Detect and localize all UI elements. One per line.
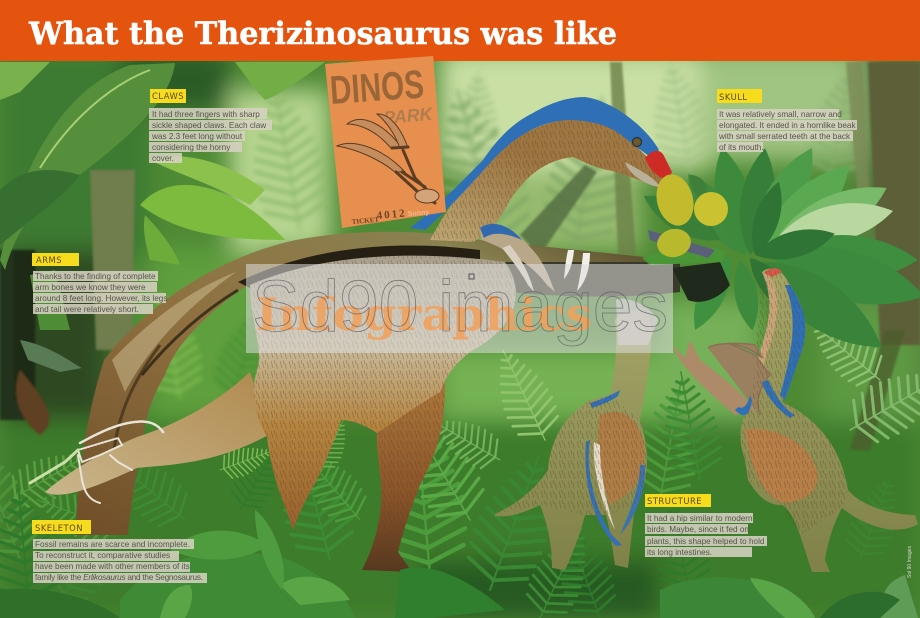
- title band: [0, 0, 920, 61]
- foreground foliage: [0, 510, 918, 618]
- title: What the Therizinosaurus was like: [28, 16, 617, 52]
- skeleton line drawing: [30, 422, 163, 503]
- text: claws description: considering the horny: [152, 143, 231, 152]
- label: arms: ARMS: [36, 255, 62, 265]
- text: structure description: plants, this shape helped to hold: [647, 537, 765, 546]
- text: claws description: was 2.3 feet long without: [151, 132, 243, 141]
- photo credit: Sol 90 Images: [907, 546, 913, 578]
- text: arms description: and tail were relatively short.: [35, 305, 139, 314]
- callout: skeleton: [32, 520, 207, 583]
- ticket number: TICKET: [351, 216, 380, 226]
- text: arms description: arm bones we know they were: [35, 283, 146, 292]
- background tree trunks: [0, 62, 920, 450]
- text: arms description: around 8 feet long. However, its legs: [35, 294, 167, 303]
- label: claws: CLAWS: [152, 91, 184, 101]
- label: structure: STRUCTURE: [647, 496, 702, 506]
- hazy palm fronds in the background: [134, 57, 876, 408]
- text: skeleton description: have been made with other members of its: [35, 562, 190, 571]
- text: skull description: of its mouth.: [719, 143, 764, 152]
- palm trunk the dinosaur pulls down: [75, 232, 655, 535]
- ticket brand title: DINOS: [329, 63, 425, 113]
- main dinosaur: tail: [45, 372, 270, 495]
- callout: arms: [32, 253, 167, 314]
- watermark outline text: Sd90 images: [252, 267, 668, 347]
- main dinosaur: arm and claws: [480, 224, 590, 292]
- red beak: [645, 151, 672, 180]
- label: skeleton: SKELETON: [35, 523, 83, 533]
- text: arms description: Thanks to the finding of complete: [35, 272, 156, 281]
- text: structure description: It had a hip similar to modern: [647, 514, 753, 523]
- eye: [632, 138, 642, 146]
- watermark orange text: Infographics: [256, 288, 592, 341]
- text: claws description: It had three fingers with sharp: [152, 110, 260, 119]
- text: structure description: birds. Maybe, since it fed on: [647, 525, 749, 534]
- ferns: [0, 307, 920, 618]
- text: skull description: elongated. It ended in a hornlike beak: [719, 121, 856, 130]
- text: skull description: It was relatively small, narrow and: [719, 110, 842, 119]
- text: arms description: [33, 271, 167, 314]
- ticket: Sunny: [408, 209, 430, 218]
- blue feather crest: [410, 97, 659, 230]
- text: skeleton description: To reconstruct it, comparative studies: [35, 551, 170, 560]
- fruit plant: [637, 139, 920, 366]
- claw fossil drawing: [337, 114, 439, 203]
- ticket top edge over band: [325, 56, 434, 66]
- callout: skull: [717, 89, 857, 152]
- text: claws description: [149, 108, 272, 163]
- label: skeleton: [32, 520, 91, 534]
- text: structure description: [645, 513, 767, 557]
- ticket subtitle: PARK: [383, 104, 435, 128]
- text: skeleton description: Fossil remains are scarce and incomplete.: [35, 540, 190, 549]
- text: claws description: sickle shaped claws. Each claw: [152, 121, 266, 130]
- main dinosaur: far leg: [362, 375, 445, 572]
- watermark panel: [246, 264, 673, 353]
- callout: claws: [149, 89, 272, 163]
- text: skeleton description: family like the Erlikosaurus and the Segnosaurus.: [35, 573, 203, 582]
- shadow behind branch inside watermark: [480, 262, 680, 296]
- main dinosaur: body: [250, 256, 516, 530]
- text: structure description: its long intestines.: [647, 548, 712, 557]
- banana leaves upper left: [0, 62, 325, 372]
- text: skull description: [717, 109, 857, 152]
- label: skull: SKULL: [719, 92, 748, 102]
- ticket: 4012: [376, 207, 407, 222]
- text: skeleton description: [33, 539, 207, 583]
- text: claws description: cover.: [152, 154, 174, 163]
- ticket: [325, 56, 446, 228]
- callout: structure: [645, 494, 767, 557]
- text: skull description: with small serrated teeth at the back: [718, 132, 851, 141]
- third dinosaur (right): [672, 268, 918, 572]
- main dinosaur: neck and head: [410, 97, 672, 242]
- second dinosaur (centre): [495, 299, 658, 570]
